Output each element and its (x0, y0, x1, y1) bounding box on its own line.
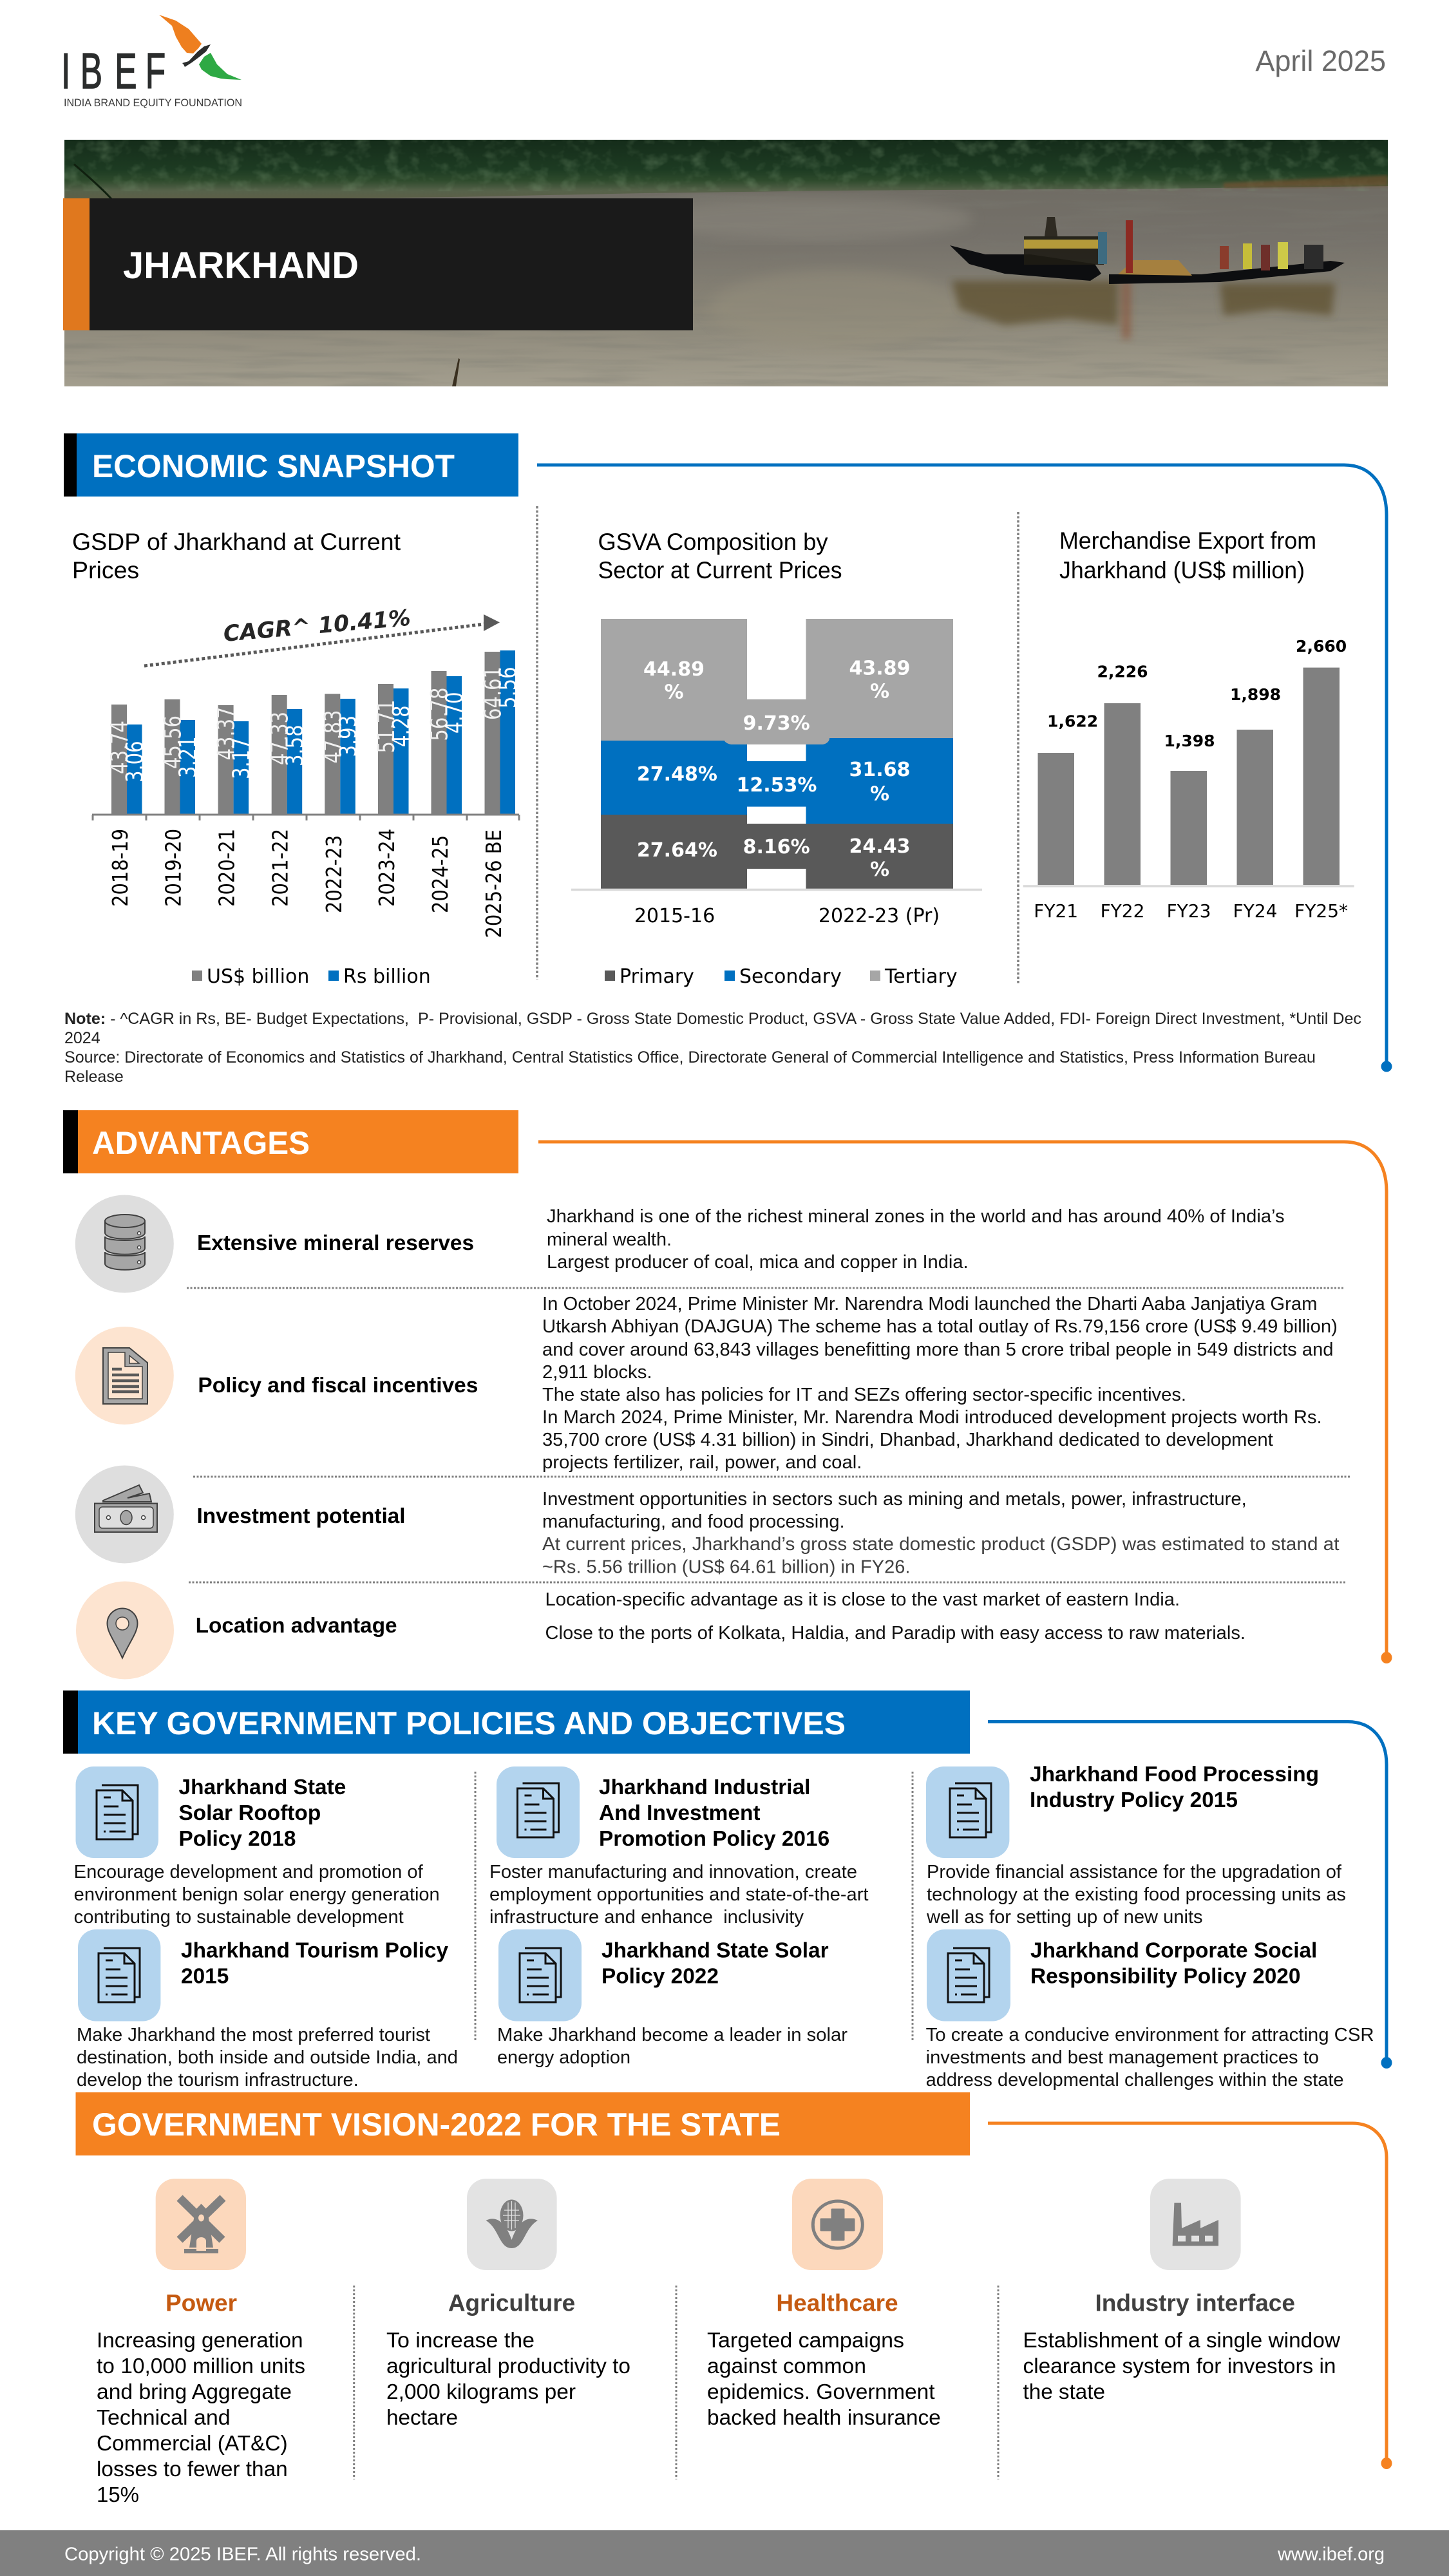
description: mineral wealth. (547, 1229, 672, 1250)
description: Establishment of a single window (1023, 2328, 1340, 2352)
segment labels 2022-23: 31.68 (849, 759, 910, 781)
legend: Secondary (739, 965, 842, 988)
connector: vision (988, 2123, 1392, 2469)
vision: power (97, 2179, 305, 2506)
policy description: develop the tourism infrastructure. (77, 2070, 359, 2090)
policy title: Solar Rooftop (179, 1801, 321, 1825)
x-axis years: 2020-21 (215, 829, 240, 907)
policy title: Jharkhand Industrial (599, 1776, 810, 1799)
description: 15% (97, 2483, 139, 2506)
icon: money (75, 1466, 174, 1564)
panel: GSVA composition (571, 528, 982, 988)
vision: agriculture (386, 2179, 630, 2429)
description: Location-specific advantage as it is close to the vast market of eastern India. (545, 1589, 1180, 1610)
date: April 2025 (1255, 44, 1386, 77)
data labels US$ billion: 64.61 (479, 667, 506, 720)
description: Increasing generation (97, 2328, 303, 2352)
segment labels 2022-23: % (870, 680, 889, 703)
policy description: environment benign solar energy generation (74, 1884, 440, 1905)
hero title band (63, 198, 693, 330)
legend (605, 965, 958, 988)
segment labels growth: 8.16% (743, 836, 810, 858)
description: and bring Aggregate (97, 2380, 292, 2403)
description: losses to fewer than (97, 2457, 288, 2481)
policy title: Policy 2018 (179, 1827, 296, 1851)
x-axis labels: FY25* (1294, 900, 1348, 922)
description: the state (1023, 2380, 1105, 2403)
segment labels 2015-16: 27.48% (637, 763, 717, 786)
description: Largest producer of coal, mica and copper in India. (547, 1252, 969, 1273)
connector: economic snapshot (537, 465, 1392, 1072)
data labels US$ billion: 47.33 (267, 712, 294, 765)
advantage: investment potential (75, 1466, 1339, 1578)
description: In March 2024, Prime Minister, Mr. Narendra Modi introduced development projects worth Rs. (542, 1407, 1322, 1428)
description: projects fertilizer, rail, power, and coal. (542, 1452, 862, 1473)
description: and cover around 63,843 villages benefitting more than 5 crore tribal people in 549 districts and (542, 1340, 1333, 1360)
heading: Agriculture (448, 2290, 575, 2316)
icon: factory (1150, 2179, 1241, 2270)
description (97, 2328, 305, 2506)
policy title: Responsibility Policy 2020 (1030, 1965, 1300, 1989)
policy title: Jharkhand State Solar (601, 1939, 829, 1963)
policy description: destination, both inside and outside India, and (77, 2047, 458, 2068)
note and source: 2024 (64, 1029, 100, 1047)
data labels Rs billion: 3.06 (121, 741, 148, 782)
description: The state also has policies for IT and SEZs offering sector-specific incentives. (542, 1385, 1186, 1405)
description: 2,000 kilograms per (386, 2380, 576, 2403)
data labels US$ billion: 47.83 (319, 710, 346, 764)
segment labels 2015-16: % (664, 681, 684, 703)
policy description: investments and best management practices to (926, 2047, 1319, 2068)
panel: merchandise export (1023, 527, 1354, 922)
policy description (926, 2025, 1374, 2090)
advantage: mineral reserves (75, 1195, 1285, 1293)
x-axis years: 2025-26 BE (482, 829, 507, 938)
policy description: Provide financial assistance for the upgradation of (927, 1862, 1342, 1882)
x-axis years (108, 829, 507, 938)
data labels US$ billion (106, 667, 506, 774)
value labels (1047, 637, 1347, 750)
chart title (598, 528, 842, 583)
policy title: Jharkhand State (179, 1776, 346, 1799)
policy description (77, 2025, 458, 2090)
value labels: 1,622 (1047, 712, 1098, 730)
section header: economic snapshot (64, 433, 518, 497)
policy description: Encourage development and promotion of (74, 1862, 424, 1882)
CAGR arrow: CAGR^ 10.41% (222, 605, 412, 647)
chart title: Jharkhand (US$ million) (1059, 556, 1305, 583)
x-axis labels (1034, 900, 1348, 922)
description (1023, 2328, 1340, 2403)
x-axis labels: 2022-23 (Pr) (819, 905, 940, 927)
policy description: Foster manufacturing and innovation, create (489, 1862, 857, 1882)
policy title: And Investment (599, 1801, 760, 1825)
description: manufacturing, and food processing. (542, 1511, 845, 1532)
CAGR arrow (144, 605, 500, 666)
footer: www.ibef.org (1277, 2544, 1385, 2565)
description (542, 1294, 1338, 1473)
footer (0, 2530, 1449, 2576)
bar chart: GSDP bars (92, 650, 519, 820)
logo wordmark: IBEF (61, 43, 166, 100)
x-axis years: 2021-22 (269, 829, 293, 907)
bar chart (1023, 668, 1354, 886)
logo black bird (182, 44, 211, 67)
section header: key government policies: KEY GOVERNMENT POLICIES AND OBJECTIVES (92, 1705, 846, 1741)
description: 35,700 crore (US$ 4.31 billion) in Sindri, Dhanbad, Jharkhand dedicated to development (542, 1430, 1273, 1450)
policy title: Jharkhand Tourism Policy (181, 1939, 448, 1963)
segment labels growth: 9.73% (743, 712, 810, 735)
panel: GSDP chart (72, 528, 522, 988)
segment labels 2015-16: 44.89 (643, 658, 705, 681)
policy: solar rooftop (74, 1766, 440, 1927)
policy title: Promotion Policy 2016 (599, 1827, 829, 1851)
x-axis years: 2018-19 (108, 829, 133, 907)
description: Commercial (AT&C) (97, 2431, 288, 2455)
vision: industry interface (1023, 2179, 1340, 2403)
description: clearance system for investors in (1023, 2354, 1336, 2378)
description (542, 1489, 1340, 1578)
x-axis labels: FY24 (1233, 900, 1277, 922)
x-axis years: 2023-24 (375, 829, 400, 907)
data labels US$ billion: 43.74 (106, 721, 133, 774)
stacked bar chart (571, 619, 982, 890)
note and source: Release (64, 1068, 124, 1086)
policy title: 2015 (181, 1965, 229, 1989)
section header: key government policies (63, 1690, 970, 1754)
policy description: employment opportunities and state-of-the-art (489, 1884, 868, 1905)
segment labels 2022-23: 24.43 (849, 835, 910, 858)
legend: Rs billion (343, 965, 431, 988)
policy description: energy adoption (497, 2047, 630, 2068)
chart title: Prices (72, 556, 139, 583)
band orange accent (63, 198, 90, 330)
icon: medical cross (792, 2179, 883, 2270)
icon: documents (926, 1766, 1009, 1858)
legend: Primary (620, 965, 694, 988)
heading: Location advantage (196, 1614, 397, 1638)
vision: healthcare (707, 2179, 941, 2429)
x-axis labels: FY22 (1101, 900, 1144, 922)
segment labels 2015-16 (637, 658, 717, 862)
description: Investment opportunities in sectors such as mining and metals, power, infrastructure, (542, 1489, 1247, 1510)
policy description: contributing to sustainable development (74, 1907, 404, 1927)
advantage: policy and fiscal (75, 1294, 1338, 1473)
description: Close to the ports of Kolkata, Haldia, and Paradip with easy access to raw materials. (545, 1623, 1245, 1643)
description: hectare (386, 2405, 458, 2429)
policy description (489, 1862, 868, 1927)
legend: Tertiary (884, 965, 958, 988)
value labels: 1,398 (1164, 732, 1215, 750)
icon: database (75, 1195, 174, 1293)
policy title: Jharkhand Food Processing (1030, 1763, 1319, 1786)
segment labels 2022-23: % (870, 858, 889, 881)
segment labels growth: 12.53% (737, 774, 817, 797)
icon: documents (498, 1929, 582, 2021)
state title: JHARKHAND (123, 245, 359, 287)
description: agricultural productivity to (386, 2354, 630, 2378)
chart title: GSVA Composition by (598, 528, 828, 555)
icon: corn (467, 2179, 557, 2270)
icon: map pin (76, 1582, 174, 1680)
band dark panel (90, 198, 693, 330)
hero photo: river and boat (64, 140, 1388, 386)
note and source: Note: - ^CAGR in Rs, BE- Budget Expectations, P- Provisional, GSDP - Gross State Domestic Product, GSVA - Gross State Value Added, FDI- Foreign Direct Investment, *Until Dec (64, 1010, 1361, 1028)
data labels Rs billion: 5.56 (495, 667, 522, 708)
policy: state solar (497, 1929, 848, 2068)
chart title (1059, 527, 1316, 583)
advantage: location (76, 1582, 1245, 1680)
logo tagline: INDIA BRAND EQUITY FOUNDATION (64, 97, 242, 109)
description: In October 2024, Prime Minister Mr. Narendra Modi launched the Dharti Aaba Janjatiya Gram (542, 1294, 1318, 1314)
segment labels 2022-23 (849, 658, 910, 881)
segment labels growth (737, 712, 817, 858)
policy: tourism (77, 1929, 458, 2090)
description (545, 1589, 1245, 1643)
x-axis years: 2019-20 (162, 829, 186, 907)
description: 2,911 blocks. (542, 1362, 652, 1383)
heading: Healthcare (776, 2290, 898, 2316)
heading: Policy and fiscal incentives (198, 1374, 478, 1397)
description (386, 2328, 630, 2429)
segment labels 2015-16: 27.64% (637, 839, 717, 862)
data labels US$ billion: 51.71 (373, 700, 400, 753)
heading: Industry interface (1095, 2290, 1295, 2316)
data labels Rs billion: 4.70 (441, 692, 468, 734)
description: backed health insurance (707, 2405, 941, 2429)
icon: documents (76, 1766, 158, 1858)
x-axis labels (634, 905, 940, 927)
section header: government vision (76, 2092, 970, 2155)
note and source (64, 1010, 1361, 1086)
x-axis years: 2022-23 (322, 835, 347, 913)
policy title: Industry Policy 2015 (1030, 1788, 1238, 1812)
x-axis labels: FY21 (1034, 900, 1078, 922)
description: Targeted campaigns (707, 2328, 904, 2352)
note and source: Source: Directorate of Economics and Statistics of Jharkhand, Central Statistics Office, Directorate General of Commercial Intelligence and Statistics, Press Information Bureau (64, 1048, 1316, 1066)
connector: policies (988, 1722, 1392, 2069)
data labels Rs billion: 3.21 (175, 736, 202, 778)
value labels: 2,660 (1296, 637, 1347, 656)
logo green wing (199, 53, 242, 80)
data labels Rs billion: 3.58 (281, 724, 308, 766)
legend (192, 965, 431, 988)
logo orange wing (159, 15, 202, 53)
data labels Rs billion: 4.28 (388, 705, 415, 747)
description (707, 2328, 941, 2429)
policy description: infrastructure and enhance inclusivity (489, 1907, 804, 1927)
policy description: Make Jharkhand become a leader in solar (497, 2025, 848, 2045)
description: Utkarsh Abhiyan (DAJGUA) The scheme has a total outlay of Rs.79,156 crore (US$ 9.49 billion) (542, 1316, 1338, 1337)
section header: government vision: GOVERNMENT VISION-2022 FOR THE STATE (92, 2107, 781, 2143)
policy description (497, 2025, 848, 2068)
section header: advantages (63, 1110, 518, 1173)
chart title: Sector at Current Prices (598, 556, 842, 583)
description: Jharkhand is one of the richest mineral zones in the world and has around 40% of India’s (547, 1206, 1285, 1227)
policy: food processing (926, 1763, 1346, 1927)
section header: advantages: ADVANTAGES (92, 1125, 310, 1161)
section header: economic snapshot: ECONOMIC SNAPSHOT (92, 448, 455, 484)
policy title: Jharkhand Corporate Social (1030, 1939, 1317, 1963)
x-axis years: 2024-25 (428, 835, 453, 913)
policy description: well as for setting up of new units (926, 1907, 1203, 1927)
description: ~Rs. 5.56 trillion (US$ 64.61 billion) in FY26. (542, 1557, 910, 1578)
policy description (74, 1862, 440, 1927)
policy description: address developmental challenges within the state (926, 2070, 1344, 2090)
policy title: Policy 2022 (601, 1965, 719, 1989)
data labels Rs billion: 3.93 (335, 715, 362, 757)
icon: windmill (156, 2179, 246, 2270)
segment labels 2022-23: % (870, 783, 889, 806)
data labels US$ billion: 45.56 (159, 715, 186, 769)
description (547, 1206, 1285, 1273)
data labels Rs billion (121, 667, 522, 782)
footer: Copyright © 2025 IBEF. All rights reserved. (64, 2544, 421, 2565)
logo: IBEF (61, 15, 242, 109)
description: against common (707, 2354, 866, 2378)
icon: documents (927, 1929, 1010, 2021)
data labels US$ billion: 56.78 (426, 688, 453, 741)
chart title: Merchandise Export from (1059, 527, 1316, 554)
description: To increase the (386, 2328, 535, 2352)
description: epidemics. Government (707, 2380, 935, 2403)
heading: Extensive mineral reserves (197, 1231, 474, 1255)
value labels: 2,226 (1097, 662, 1148, 681)
segment labels 2022-23: 43.89 (849, 658, 910, 680)
heading: Power (166, 2290, 237, 2316)
data labels Rs billion: 3.17 (228, 737, 255, 779)
connector: advantages (538, 1142, 1392, 1663)
description: to 10,000 million units (97, 2354, 305, 2378)
legend: US$ billion (207, 965, 309, 988)
icon: document (75, 1327, 174, 1425)
x-axis labels: FY23 (1167, 900, 1211, 922)
icon: documents (497, 1766, 580, 1858)
icon: documents (78, 1929, 160, 2021)
policy description (926, 1862, 1346, 1927)
policy: industrial and investment (489, 1766, 868, 1927)
policy description: technology at the existing food processing units as (927, 1884, 1346, 1905)
x-axis labels: 2015-16 (634, 905, 715, 927)
policy: corporate social responsibility (926, 1929, 1374, 2090)
chart title (72, 528, 401, 583)
policy description: To create a conducive environment for attracting CSR (926, 2025, 1374, 2045)
description: At current prices, Jharkhand’s gross state domestic product (GSDP) was estimated to stand at (542, 1534, 1340, 1555)
heading: Investment potential (197, 1504, 406, 1528)
data labels US$ billion: 43.37 (213, 707, 240, 760)
policy description: Make Jharkhand the most preferred tourist (77, 2025, 430, 2045)
value labels: 1,898 (1230, 685, 1281, 704)
description: Technical and (97, 2405, 231, 2429)
chart title: GSDP of Jharkhand at Current (72, 528, 401, 555)
